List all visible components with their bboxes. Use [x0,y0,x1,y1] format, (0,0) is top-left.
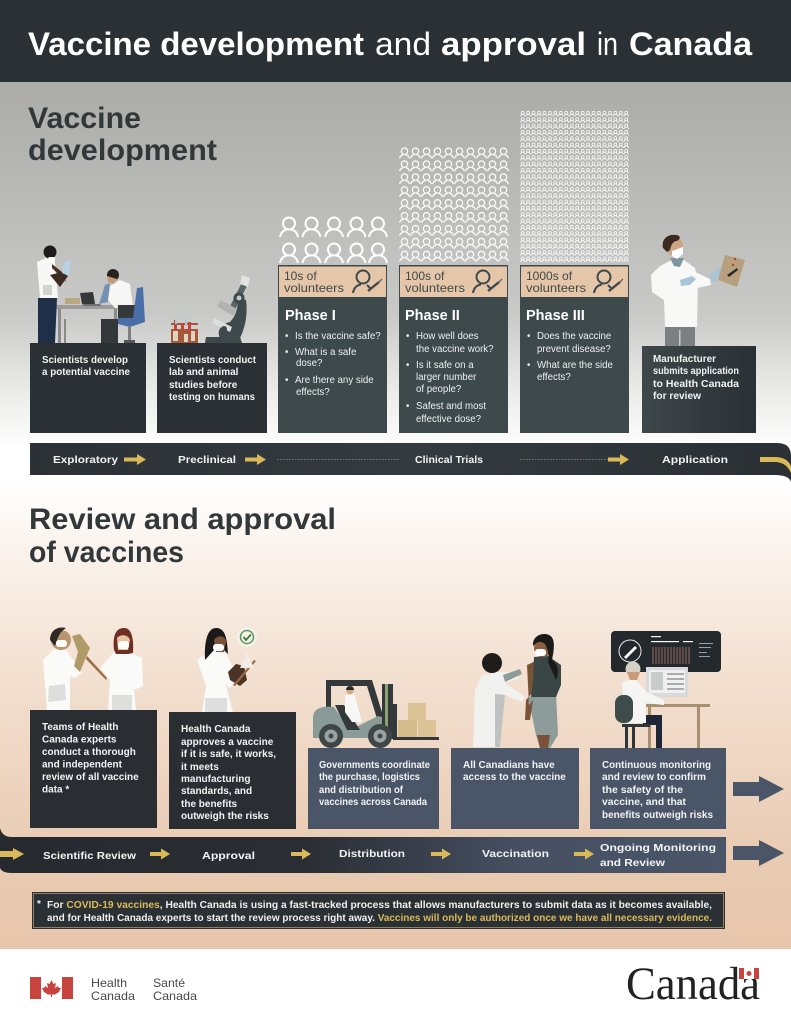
label: ongoing monitoring and review: Ongoing Monitoring [600,842,716,854]
logo: Canada wordmark: Canada [626,958,760,1010]
panel: phase III: Phase III [526,308,585,324]
label: exploratory: Exploratory [53,454,118,466]
panel: ongoing monitoring [590,748,726,829]
title banner: Canada [629,26,752,62]
panel: phase I [278,265,387,433]
panel: scientific review [30,710,157,828]
timeline bar: development stages [30,443,791,482]
panel: phase III: prevent disease? [537,344,611,355]
panel: distribution: vaccines across Canada [319,797,427,808]
arrow: yellow connector [760,457,791,473]
panel: phase II: of people? [416,384,462,395]
panel: phase III: effects? [537,372,571,383]
arrow: review to approval [150,848,170,860]
arrow: preclinical to clinical trials [245,454,266,465]
label: ongoing monitoring and review [600,842,716,869]
panel: approval: approves a vaccine [181,737,274,748]
panel: distribution [308,748,439,829]
heading: review and approval [29,503,336,569]
illustration: health canada experts [43,628,143,710]
panel: application [642,346,756,433]
panel: phase II: 100s of [405,269,445,283]
panel: ongoing monitoring: vaccine, and that [602,797,687,808]
panel: approval: Health Canada [181,724,251,735]
panel: ongoing monitoring: benefits outweigh risks [602,810,713,821]
title banner [0,0,791,82]
panel: scientific review: Teams of Health [42,722,118,733]
label: scientific review: Scientific Review [43,850,137,862]
logo text: Health Canada / Santé Canada: Santé [153,976,185,990]
logo: Canadian flag [30,977,73,999]
arrow: entering connector [0,848,24,860]
panel: phase I: What is a safe [295,347,356,358]
panel: phase I: • [285,347,289,358]
illustration: test tubes and microscope [171,275,250,343]
panel: distribution: Governments coordinate [319,760,430,771]
label: preclinical: Preclinical [178,454,236,466]
panel: distribution: the purchase, logistics [319,772,420,783]
illustration: vaccination [473,634,561,748]
panel: scientific review: data * [42,784,69,796]
panel: application: Manufacturer [653,354,716,365]
panel: phase II: larger number [416,372,477,383]
heading: vaccine development: Vaccine [28,102,141,135]
label: approval: Approval [202,850,255,862]
panel: vaccination: access to the vaccine [463,772,566,783]
panel: phase II: the vaccine work? [416,344,494,355]
panel: phase I: 10s of [284,269,317,283]
panel: phase II: effective dose? [416,414,482,425]
panel: scientific review: review of all vaccine [42,772,139,783]
heading: review and approval: of vaccines [29,536,184,569]
illustration: scientists in a lab [37,246,145,343]
logo text: Health Canada / Santé Canada: Health [91,976,127,990]
arrow: timeline continues [733,840,784,866]
panel: scientific review: conduct a thorough [42,747,136,758]
heading: vaccine development: development [28,134,217,167]
panel: phase II: • [406,360,410,371]
title banner: and [375,26,431,62]
arrow: distribution to vaccination [431,848,451,860]
panel: phase II: volunteers [405,281,465,295]
callout: COVID-19 note: For COVID-19 vaccines, Health Canada is using a fast-tracked process that allows manufacturers to submit data as it becomes available, [47,900,712,911]
panel: approval: standards, and [181,786,252,797]
volunteers grid: phase I [280,218,387,263]
panel: vaccination [451,748,579,829]
label: ongoing monitoring and review: and Review [600,857,666,869]
panel: preclinical [157,343,267,433]
panel: approval [169,712,296,829]
panel: approval: it meets [181,762,219,773]
arrow: exploratory to preclinical [124,454,146,465]
panel: phase I: Phase I [285,308,336,324]
panel: exploratory [30,343,146,433]
logo text: Health Canada / Santé Canada: Canada [91,989,135,1003]
callout: COVID-19 note [32,892,725,929]
arrow: approval to distribution [291,848,311,860]
panel: phase II: • [406,331,410,342]
illustration: approving expert with check mark [197,627,257,712]
panel: phase II: How well does [416,331,479,342]
panel: application: submits application [653,366,739,377]
volunteers grid: phase III [520,111,629,263]
panel: preclinical: testing on humans [169,392,255,403]
title banner: in [597,26,618,62]
callout: COVID-19 note: and for Health Canada experts to start the review process right away. Vaccines will only be authorized once we have all necessary evidence. [47,913,712,924]
timeline bar: review stages [0,828,726,873]
panel: scientific review: and independent [42,760,123,770]
panel: ongoing monitoring: and review to confirm [602,772,706,783]
logo text: Health Canada / Santé Canada: Canada [153,989,197,1003]
panel: preclinical: Scientists conduct [169,355,257,366]
background: vaccine development [0,82,791,482]
panel: phase I: volunteers [284,281,344,295]
panel: phase III: 1000s of [526,269,573,283]
panel: phase I: Is the vaccine safe? [295,331,381,342]
panel: phase I: Are there any side [295,375,374,386]
panel: phase II: • [406,401,410,412]
panel: phase II [399,265,508,433]
heading: vaccine development [28,102,217,167]
panel: preclinical: lab and animal [169,367,239,378]
background: review and approval [0,480,791,950]
arrow: clinical trials to application [608,454,629,465]
panel: scientific review: Canada experts [42,734,117,746]
footer background [0,949,791,1024]
panel: phase III: Does the vaccine [537,331,611,342]
illustration: forklift [313,680,439,748]
panel: phase III: What are the side [537,360,613,371]
panel: phase II: Safest and most [416,401,486,412]
panel: phase III: • [527,331,531,342]
arrow: panels continue [733,776,784,802]
panel: phase I: effects? [296,387,330,398]
label: vaccination: Vaccination [482,848,549,860]
illustration: monitoring station [611,631,721,748]
panel: application: for review [653,391,701,402]
logo text: Health Canada / Santé Canada [91,976,197,1003]
volunteers grid: phase II [399,148,509,264]
panel: phase III: • [527,360,531,371]
panel: phase I: • [285,331,289,342]
panel: exploratory: a potential vaccine [42,367,130,378]
heading: review and approval: Review and approval [29,503,336,536]
panel: vaccination: All Canadians have [463,760,555,771]
label: application: Application [662,454,728,466]
label: distribution: Distribution [339,848,405,860]
panel: ongoing monitoring: Continuous monitoring [602,760,711,771]
arrow: vaccination to monitoring [574,848,594,860]
panel: ongoing monitoring: the safety of the [602,785,683,796]
panel: phase III [520,265,629,433]
panel: approval: the benefits [181,799,238,810]
panel: phase I: dose? [296,358,323,369]
illustration: manufacturer with clipboard [651,235,745,346]
panel: approval: manufacturing [181,774,250,785]
title banner: approval [441,26,586,62]
panel: phase II: Phase II [405,308,460,324]
panel: exploratory: Scientists develop [42,355,128,366]
panel: preclinical: studies before [169,380,238,391]
panel: phase I: • [285,375,289,386]
label: clinical trials: Clinical Trials [415,454,483,466]
callout: COVID-19 note: * [37,899,41,910]
panel: distribution: and distribution of [319,785,404,796]
panel: phase III: volunteers [526,281,586,295]
panel: application: to Health Canada [653,379,739,390]
title banner: Vaccine development [28,26,364,62]
panel: phase II: Is it safe on a [416,360,474,371]
panel: approval: if it is safe, it works, [181,749,276,760]
panel: approval: outweigh the risks [181,811,269,822]
